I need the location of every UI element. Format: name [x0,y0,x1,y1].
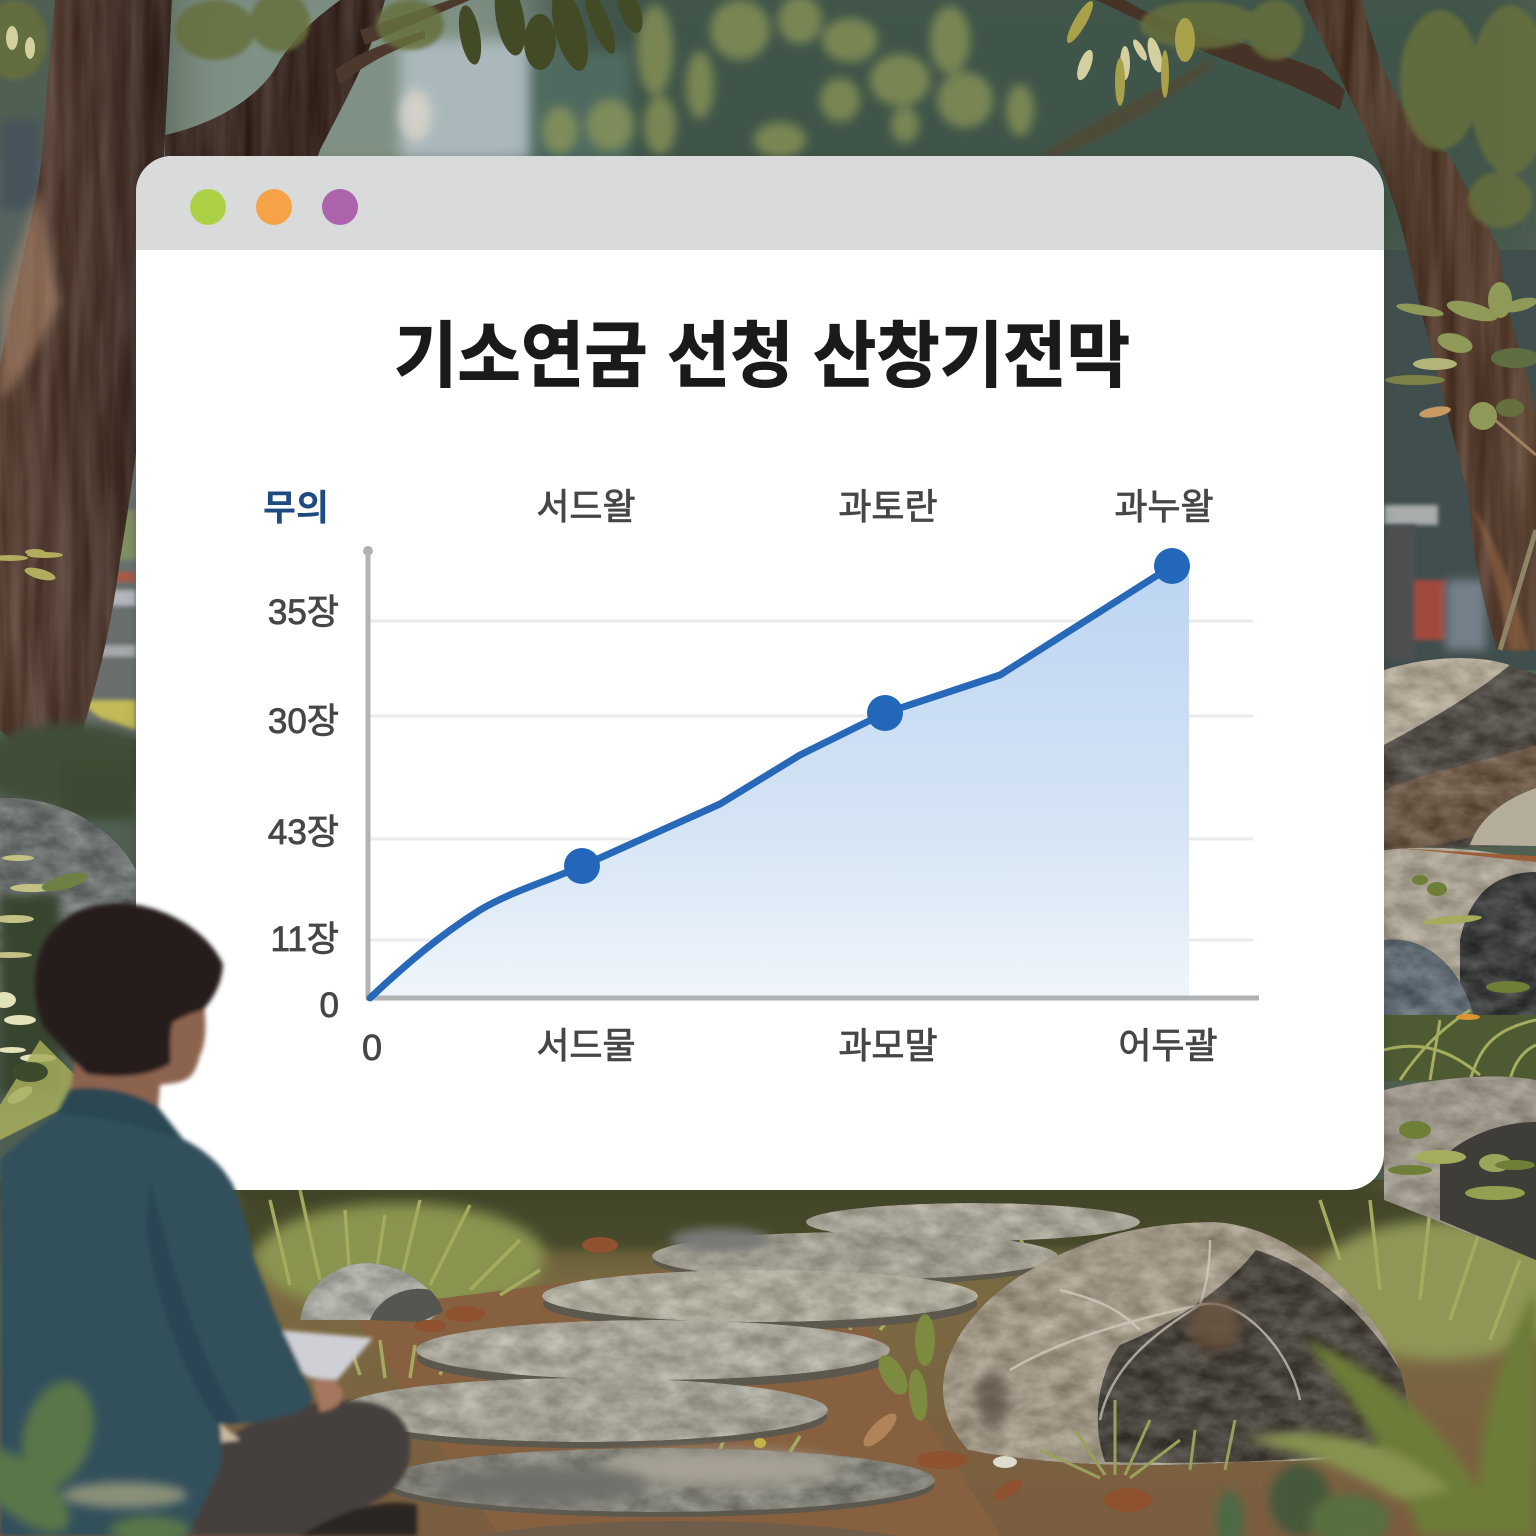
right tree trunk and branches [1040,0,1536,650]
distant left scene [0,160,60,460]
sweater collar [57,1088,183,1139]
y axis [363,546,373,998]
y axis labels: 0 [320,986,339,1025]
left side rock and plants [0,723,160,1140]
y axis labels [268,593,339,1025]
distant right scene [1384,250,1536,670]
rock one [1384,659,1536,850]
top column labels: 과누왈 [1114,486,1214,527]
grass tufts [270,1190,1520,1452]
left leaf sprig [0,549,63,583]
hair [35,903,223,1076]
top column labels: 서드왈 [536,486,636,527]
axis unit label: 무의 [263,487,329,528]
right rock leaves [1388,875,1535,1200]
top column labels: 과토란 [838,486,938,527]
y axis labels: 30장 [268,702,339,741]
x axis labels [362,1025,1218,1068]
x axis labels: 서드물 [536,1025,636,1066]
y axis labels: 43장 [268,813,339,852]
data line [370,566,1172,998]
x axis labels: 어두괄 [1118,1025,1218,1066]
window control dots [190,189,358,225]
small rock [300,1263,443,1322]
neck and ear [70,1000,205,1108]
y axis labels: 35장 [268,593,339,632]
shaded area under line [370,566,1189,998]
x axis labels: 과모말 [838,1025,938,1066]
data points [564,548,1190,884]
right leaf sprig [1385,282,1536,650]
ground and garden path [0,1180,1536,1536]
book [278,1330,373,1380]
foreground blurred leaves [0,1290,1536,1536]
gridlines [370,621,1253,940]
bokeh foliage [542,0,1034,158]
boulder grass [1040,1400,1235,1478]
x axis labels: 0 [362,1027,382,1068]
y axis labels: 11장 [270,920,339,959]
top column labels [536,486,1214,527]
right side rocks and plants [1384,658,1536,1260]
rock three [1384,848,1536,1015]
trousers [187,1401,410,1536]
person reading, seen from behind [0,903,417,1536]
second leg [300,1503,417,1536]
foliage: upper leaves [0,0,1536,650]
left tree trunk and branches [0,0,470,760]
fallen leaves and small plants [414,1237,1152,1512]
browser window panel [136,156,1384,1190]
stepping stones [300,1203,1140,1536]
gap under arm [210,1415,240,1442]
x axis [366,996,1259,1000]
rock four [1384,1076,1536,1260]
big marbled boulder [943,1222,1409,1465]
hand [313,1379,343,1412]
grass [1384,1015,1536,1081]
sleeve shading [146,1180,240,1424]
rock two [1470,788,1536,846]
line chart [263,486,1259,1068]
chart title: 기소연굼 선청 산창기전막 [394,317,1130,397]
sweater body [0,1088,313,1536]
window title bar [136,156,1384,250]
